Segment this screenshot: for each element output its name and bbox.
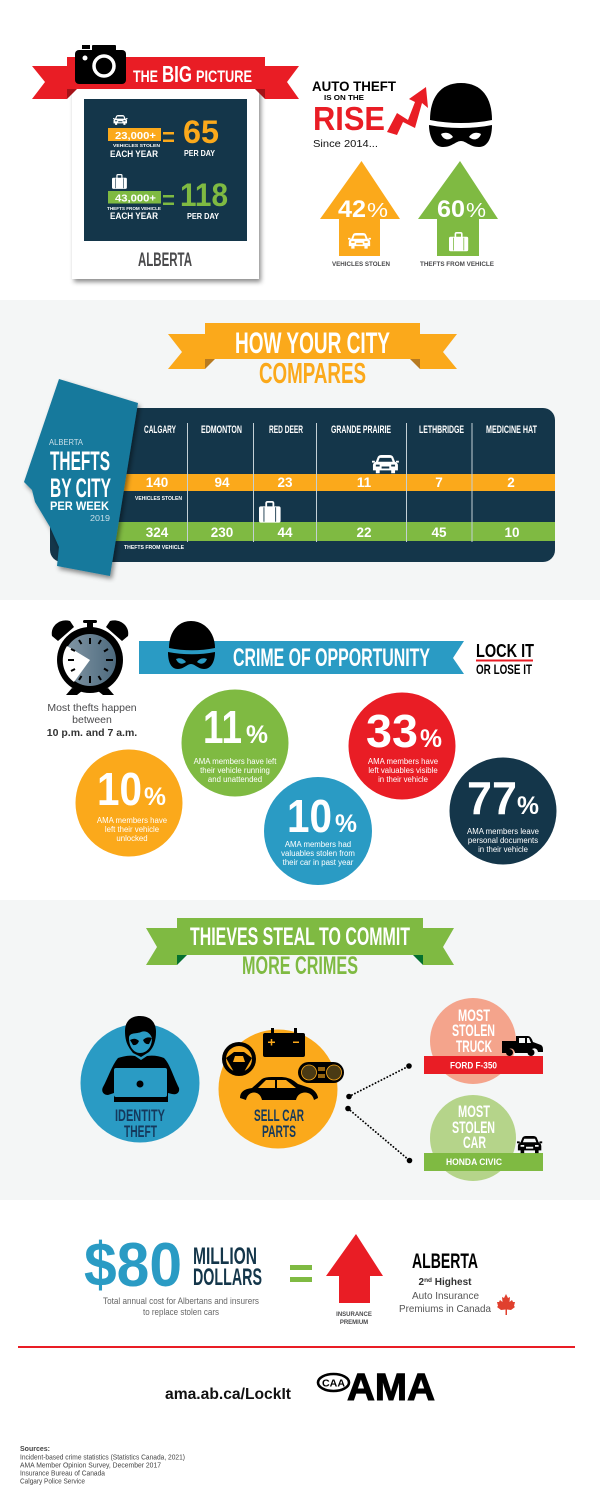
heading: $80 million dollars: $80	[84, 1231, 182, 1300]
equals sign	[290, 1265, 312, 1282]
thefts per day: 118	[180, 177, 228, 213]
icon: pickup truck	[502, 1036, 543, 1053]
stat circle: 11% running: 11	[203, 701, 242, 753]
arrow: insurance premium: INSURANCE	[336, 1312, 372, 1318]
lock it or lose it: OR LOSE IT	[476, 661, 532, 677]
ribbon: how your city compares: HOW YOUR CITY	[235, 327, 390, 360]
thefts from vehicle values: 22	[356, 525, 372, 540]
panel: alberta map label: THEFTS	[50, 446, 110, 476]
sources: AMA Member Opinion Survey, December 2017	[20, 1462, 161, 1470]
vehicles stolen values: 7	[435, 475, 443, 490]
stat circle: 77% documents: %	[517, 792, 539, 820]
heading: auto theft is on the rise: IS ON THE	[324, 93, 364, 102]
arrow: thefts from vehicle 60%: THEFTS FROM VEHICLE	[420, 261, 495, 268]
text: most thefts happen: between	[72, 714, 112, 726]
arrow: vehicles stolen 42%: VEHICLES STOLEN	[332, 261, 390, 268]
text: alberta second highest: ALBERTA	[412, 1250, 478, 1273]
arrow: insurance premium	[326, 1234, 383, 1326]
ribbon: thieves steal to commit more crimes: MORE CRIMES	[242, 952, 358, 980]
vehicles stolen values	[146, 475, 515, 490]
ribbon: crime of opportunity: CRIME OF OPPORTUNITY	[233, 644, 430, 672]
callout: most stolen car: HONDA CIVIC	[446, 1157, 502, 1168]
stat circle: 10% stolen: AMA members had	[285, 840, 351, 849]
city names: LETHBRIDGE	[419, 424, 464, 436]
icon: luggage on table	[259, 501, 281, 523]
stat circle: 10% stolen: 10	[287, 790, 332, 842]
lock it or lose it	[476, 641, 534, 677]
heading: $80 million dollars	[84, 1231, 262, 1318]
callout: most stolen truck: MOST	[458, 1006, 490, 1025]
vehicles stolen count: VEHICLES STOLEN	[113, 143, 160, 148]
icon: battery	[263, 1028, 305, 1057]
thefts from vehicle values: 45	[431, 525, 447, 540]
equals sign	[163, 195, 174, 205]
city names: MEDICINE HAT	[486, 424, 537, 436]
ribbon: the big picture: PICTURE	[196, 68, 252, 86]
stat circle: 10% unlocked: unlocked	[116, 834, 148, 843]
red divider	[18, 1346, 575, 1348]
arrow: vehicles stolen 42%: %	[367, 200, 388, 222]
arrow: insurance premium: PREMIUM	[340, 1320, 368, 1326]
stat circle: 33% visible: in their vehicle	[378, 775, 428, 784]
stat circle: 33% visible: left valuables visible	[368, 766, 438, 775]
text: alberta second highest: nd	[424, 1277, 432, 1284]
stat circle: 11% running: %	[246, 721, 268, 749]
icon: maple leaf	[497, 1294, 515, 1315]
panel: alberta map label: 2019	[90, 513, 110, 523]
arrow: vehicles stolen 42%: 42	[338, 196, 366, 223]
stat circle: 77% documents: AMA members leave	[467, 827, 539, 836]
thefts from vehicle count	[107, 191, 161, 221]
panel: the big picture polaroid	[72, 89, 259, 279]
panel: alberta map label: BY CITY	[50, 473, 111, 503]
heading: auto theft is on the rise: AUTO THEFT	[312, 78, 396, 94]
thefts from vehicle values: 324	[146, 525, 169, 540]
text: most thefts happen	[47, 702, 137, 739]
icon: car on table	[372, 455, 399, 473]
text: alberta second highest: Highest	[432, 1277, 472, 1288]
stat circle: 10% unlocked: %	[144, 783, 166, 811]
panel: thefts by city table	[50, 408, 555, 562]
arrow: thefts from vehicle 60%: %	[466, 200, 486, 222]
vehicles stolen values: 2	[507, 475, 515, 490]
vehicles stolen count: 23,000+	[115, 130, 156, 142]
ribbon: thieves steal to commit more crimes	[146, 918, 454, 980]
stat circle: 10% unlocked: 10	[97, 763, 142, 815]
stat circle: 33% visible: AMA members have	[368, 757, 438, 766]
callout: most stolen truck	[424, 998, 543, 1084]
arrow: vehicles stolen 42%	[320, 161, 400, 268]
icon: car	[113, 115, 128, 125]
stat circle: 33% visible	[348, 692, 456, 800]
text: alberta second highest: 2	[419, 1277, 424, 1288]
website url: ama.ab.ca/LockIt	[165, 1386, 292, 1403]
logo: caa ama: CAA	[322, 1378, 345, 1390]
circle: sell car parts: PARTS	[262, 1122, 296, 1141]
stat circle: 33% visible: 33	[366, 705, 418, 757]
icon: thief on ribbon	[168, 621, 215, 669]
ribbon: how your city compares: COMPARES	[259, 358, 366, 390]
ribbon: the big picture	[32, 57, 299, 99]
dotted connector to car	[345, 1106, 412, 1163]
heading: auto theft is on the rise: Since 2014...	[313, 138, 378, 150]
icon: luggage	[112, 174, 127, 189]
thefts from vehicle count: THEFTS FROM VEHICLE	[107, 206, 161, 211]
stat circle: 10% stolen: %	[335, 810, 357, 838]
stat circle: 77% documents: personal documents	[468, 836, 538, 845]
sources: Incident-based crime statistics (Statistics Canada, 2021)	[20, 1454, 185, 1462]
sources: Sources:	[20, 1446, 50, 1453]
callout: most stolen car: STOLEN	[452, 1118, 495, 1137]
circle: identity theft: THEFT	[124, 1122, 157, 1141]
callout: most stolen truck: STOLEN	[452, 1021, 495, 1040]
heading: $80 million dollars: Total annual cost for Albertans and insurers	[103, 1296, 259, 1307]
vehicles stolen count: EACH YEAR	[110, 149, 158, 159]
icon: steering wheel	[222, 1042, 256, 1076]
heading: $80 million dollars: MILLION	[193, 1243, 257, 1270]
circle: sell car parts: SELL CAR	[254, 1106, 304, 1125]
icon: rising arrow	[387, 87, 428, 135]
icon: camera	[75, 45, 126, 84]
panel: alberta map label: PER WEEK	[50, 499, 109, 513]
heading: auto theft is on the rise	[312, 78, 396, 150]
stat circle: 77% documents: in their vehicle	[478, 845, 528, 854]
stat circle: 11% running: AMA members have left	[194, 757, 277, 766]
sources	[20, 1446, 185, 1486]
city names: RED DEER	[269, 424, 303, 436]
stat circle: 10% unlocked: left their vehicle	[105, 825, 159, 834]
thefts from vehicle values: 44	[277, 525, 293, 540]
icon: car body	[240, 1077, 318, 1100]
vehicles stolen values: 11	[357, 475, 372, 490]
stat circle: 11% running	[182, 690, 288, 796]
panel: alberta map label: ALBERTA	[49, 438, 84, 447]
stat circle: 10% unlocked: AMA members have	[97, 816, 167, 825]
heading: $80 million dollars: to replace stolen cars	[143, 1307, 219, 1318]
panel: alberta map label	[24, 379, 138, 576]
icon: alarm clock	[52, 620, 128, 695]
circle: sell car parts	[218, 1028, 344, 1148]
vehicles stolen values: 94	[214, 475, 230, 490]
arrow: thefts from vehicle 60%: 60	[437, 196, 465, 223]
callout: most stolen truck: FORD F-350	[450, 1060, 497, 1072]
text: most thefts happen: Most thefts happen	[47, 702, 137, 714]
sources: Calgary Police Service	[20, 1478, 85, 1486]
panel: thefts by city table: THEFTS FROM VEHICLE	[124, 545, 185, 551]
circle: identity theft	[80, 1016, 200, 1142]
polaroid caption: ALBERTA	[138, 250, 192, 271]
stat circle: 77% documents	[450, 758, 556, 864]
thefts from vehicle values: 230	[211, 525, 233, 540]
icon: hacker at laptop	[102, 1016, 179, 1102]
thefts from vehicle values	[146, 525, 520, 540]
vehicles stolen count	[108, 128, 161, 159]
logo: caa ama: AMA	[347, 1367, 435, 1409]
stat circle: 11% running: their vehicle running	[200, 766, 270, 775]
circle: identity theft: IDENTITY	[115, 1106, 165, 1125]
ribbon: thieves steal to commit more crimes: THIEVES STEAL TO COMMIT	[190, 923, 410, 951]
stat circle: 11% running: and unattended	[208, 775, 262, 784]
ribbon: the big picture: BIG	[162, 61, 192, 87]
vehicles stolen values: 23	[277, 475, 293, 490]
callout: most stolen car	[424, 1095, 543, 1181]
icon: car	[517, 1136, 542, 1153]
stat circle: 10% stolen: valuables stolen from	[281, 849, 355, 858]
city names	[144, 424, 537, 436]
icon: thief head	[429, 83, 492, 147]
heading: auto theft is on the rise: RISE	[313, 100, 385, 137]
lock it or lose it: LOCK IT	[476, 641, 534, 661]
thefts from vehicle count: EACH YEAR	[110, 211, 158, 221]
arrow: thefts from vehicle 60%	[418, 161, 498, 268]
callout: most stolen car: MOST	[458, 1102, 490, 1121]
stat circle: 10% stolen: their car in past year	[283, 858, 354, 867]
city names: EDMONTON	[201, 424, 242, 436]
vehicles per day: PER DAY	[184, 149, 216, 158]
vehicles per day: 65	[183, 114, 219, 150]
thefts per day: PER DAY	[187, 212, 220, 221]
text: alberta second highest: Auto Insurance	[412, 1290, 479, 1302]
dotted connector to truck	[346, 1063, 412, 1099]
callout: most stolen truck: TRUCK	[456, 1037, 492, 1056]
stat circle: 10% stolen	[264, 777, 372, 885]
thefts from vehicle values: 10	[504, 525, 520, 540]
stat circle: 33% visible: %	[420, 725, 442, 753]
vehicles stolen values: 140	[146, 475, 168, 490]
city names: GRANDE PRAIRIE	[331, 424, 391, 436]
stat circle: 77% documents: 77	[467, 772, 517, 824]
stat circle: 10% unlocked	[76, 750, 182, 856]
city names: CALGARY	[144, 424, 176, 436]
thefts from vehicle count: 43,000+	[115, 192, 156, 204]
ribbon: crime of opportunity	[139, 641, 464, 674]
callout: most stolen car: CAR	[463, 1133, 486, 1152]
sources: Insurance Bureau of Canada	[20, 1470, 105, 1478]
heading: $80 million dollars: DOLLARS	[193, 1264, 262, 1291]
ribbon: the big picture: THE	[133, 68, 158, 86]
equals sign	[163, 132, 174, 142]
text: alberta second highest: Premiums in Canada	[399, 1303, 491, 1315]
text: most thefts happen: 10 p.m. and 7 a.m.	[47, 727, 137, 739]
ribbon: how your city compares	[168, 323, 457, 390]
panel: thefts by city table: VEHICLES STOLEN	[135, 496, 182, 502]
text: alberta second highest	[399, 1250, 491, 1315]
icon: dashboard gauges	[298, 1062, 344, 1083]
